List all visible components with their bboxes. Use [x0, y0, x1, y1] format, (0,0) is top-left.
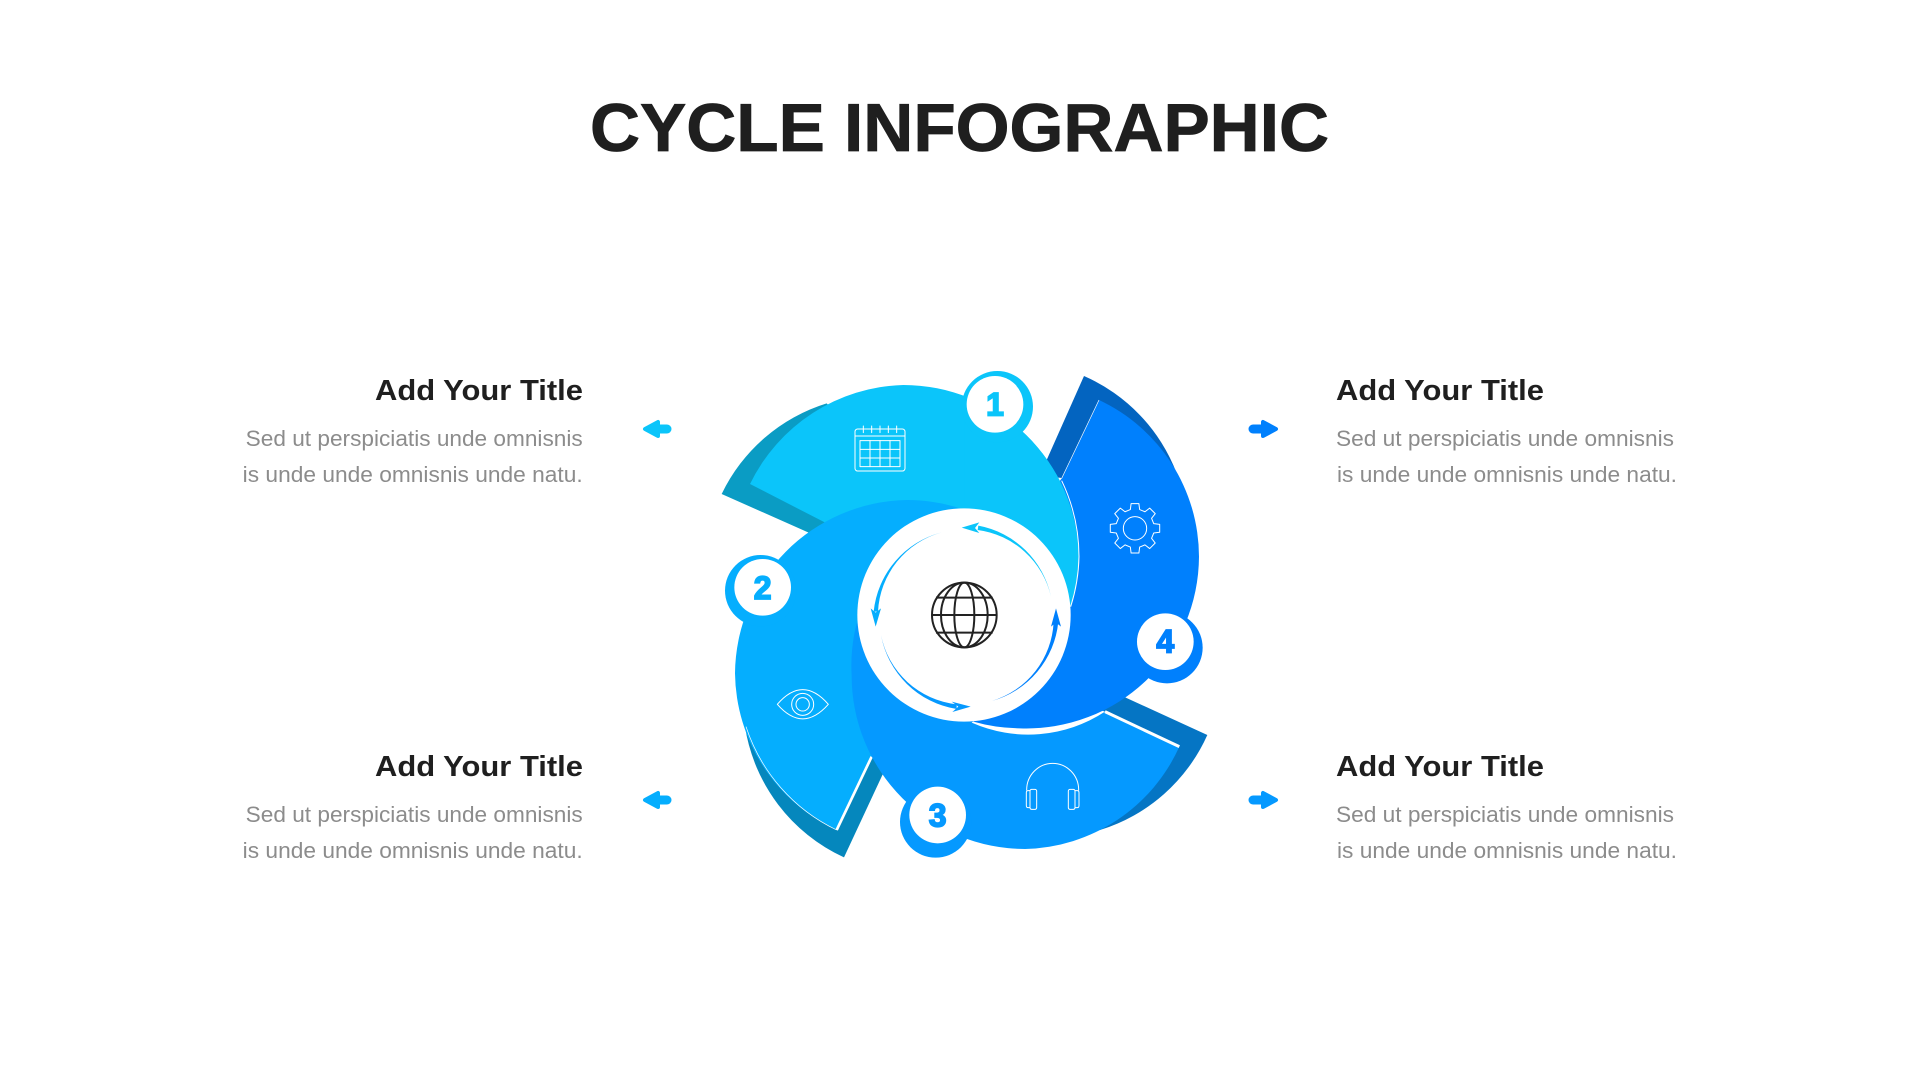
badge 3: 3: [929, 797, 947, 833]
blade 1: [750, 385, 1079, 615]
text block: bottom left: Add Your Title: [375, 751, 583, 783]
text block: top left: is unde unde omnisnis unde natu.: [243, 462, 583, 487]
badge 3: [900, 786, 971, 858]
text block: top left: [243, 375, 583, 487]
text block: top right: Sed ut perspiciatis unde omnisnis: [1336, 426, 1674, 451]
text block: bottom right: [1336, 751, 1677, 863]
badge 1: 1: [986, 387, 1004, 423]
white crescent under blade 4: [972, 700, 1105, 735]
arrow: top left: [645, 422, 667, 436]
blade 1 overlap over blade 4: [1022, 432, 1080, 607]
icon: globe: [932, 583, 997, 647]
badge 4: [1131, 612, 1203, 683]
text block: top left: Add Your Title: [375, 375, 583, 407]
text block: top left: Sed ut perspiciatis unde omnisnis: [246, 426, 583, 451]
blade 4: [964, 400, 1199, 728]
badge 4: 4: [1156, 624, 1174, 660]
shadow: blade 3: [1067, 687, 1207, 830]
icon: gear: [1110, 504, 1160, 553]
text block: bottom right: Sed ut perspiciatis unde omnisnis: [1336, 802, 1674, 827]
inner arrow: left: [871, 532, 942, 627]
arrow: bottom left: [645, 793, 667, 807]
title: CYCLE INFOGRAPHIC: [590, 90, 1329, 166]
icon: headphones: [1026, 763, 1079, 809]
arrow: bottom right: [1253, 793, 1276, 807]
arrow: top right: [1253, 422, 1276, 436]
text block: bottom left: Sed ut perspiciatis unde omnisnis: [246, 802, 583, 827]
text block: bottom right: Add Your Title: [1336, 751, 1544, 783]
badge 2: [725, 555, 796, 626]
text block: top right: Add Your Title: [1336, 375, 1544, 407]
text block: bottom left: is unde unde omnisnis unde natu.: [243, 838, 583, 863]
shadow: blade 2: [745, 717, 890, 857]
blade 3: [851, 615, 1179, 849]
icon: eye: [777, 690, 828, 719]
inner arrow: right: [992, 608, 1061, 701]
blade 2: [735, 500, 964, 830]
shadow: blade 1: [722, 403, 873, 541]
inner arrow: top right: [962, 522, 1051, 597]
icon: calendar: [855, 426, 905, 471]
text block: top right: is unde unde omnisnis unde natu.: [1337, 462, 1677, 487]
cycle diagram: [722, 371, 1207, 858]
infographic canvas: [244, 103, 1675, 858]
badge 2: 2: [754, 570, 772, 606]
inner arrow: bottom: [881, 635, 971, 712]
text block: bottom right: is unde unde omnisnis unde natu.: [1337, 838, 1677, 863]
shadow: blade 4: [1040, 376, 1177, 483]
center white circle: [857, 508, 1071, 722]
text block: bottom left: [243, 751, 583, 863]
badge 1: [962, 371, 1033, 442]
text block: top right: [1336, 375, 1677, 487]
